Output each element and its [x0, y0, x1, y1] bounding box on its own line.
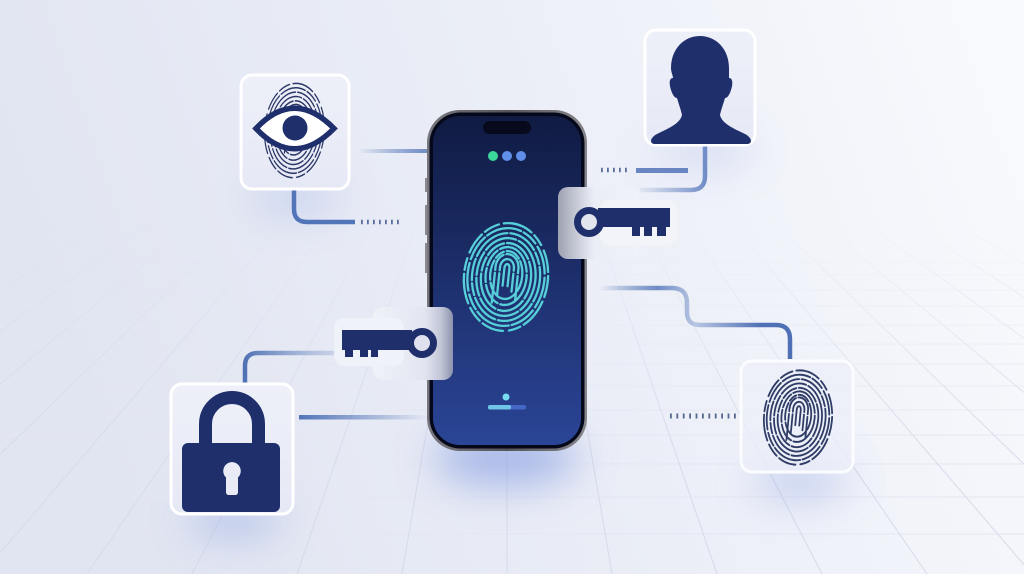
right key icon	[578, 208, 670, 236]
card: lock	[171, 384, 293, 514]
status dots	[488, 151, 526, 161]
glass tile: left key	[334, 307, 453, 380]
eye icon	[256, 108, 334, 149]
card: fingerprint	[741, 361, 853, 472]
connector: eye card to ticks	[294, 190, 403, 222]
connector: ticks to fingerprint card	[670, 414, 739, 418]
left key icon	[342, 330, 434, 357]
camera notch	[483, 121, 531, 134]
connector: eye card to phone	[358, 149, 428, 153]
progress indicator	[488, 394, 526, 410]
phone screen	[433, 116, 581, 445]
card: eye with fingerprint	[241, 75, 349, 189]
phone side buttons	[425, 178, 427, 273]
soft blue glows beneath elements	[187, 132, 848, 538]
head and shoulders icon	[651, 36, 751, 144]
connector: face card	[601, 146, 705, 190]
phone	[426, 110, 587, 451]
padlock icon	[182, 398, 280, 512]
phone fingerprint	[459, 219, 553, 335]
dark fingerprint icon	[760, 367, 836, 468]
phone frame	[427, 110, 587, 451]
card: face silhouette	[645, 30, 755, 145]
connector: phone to fingerprint card	[600, 288, 790, 359]
faint fingerprint	[261, 80, 328, 181]
glass tile: right key	[558, 187, 677, 259]
connector: lock to phone	[299, 415, 429, 420]
connector: lock to key	[245, 353, 335, 384]
